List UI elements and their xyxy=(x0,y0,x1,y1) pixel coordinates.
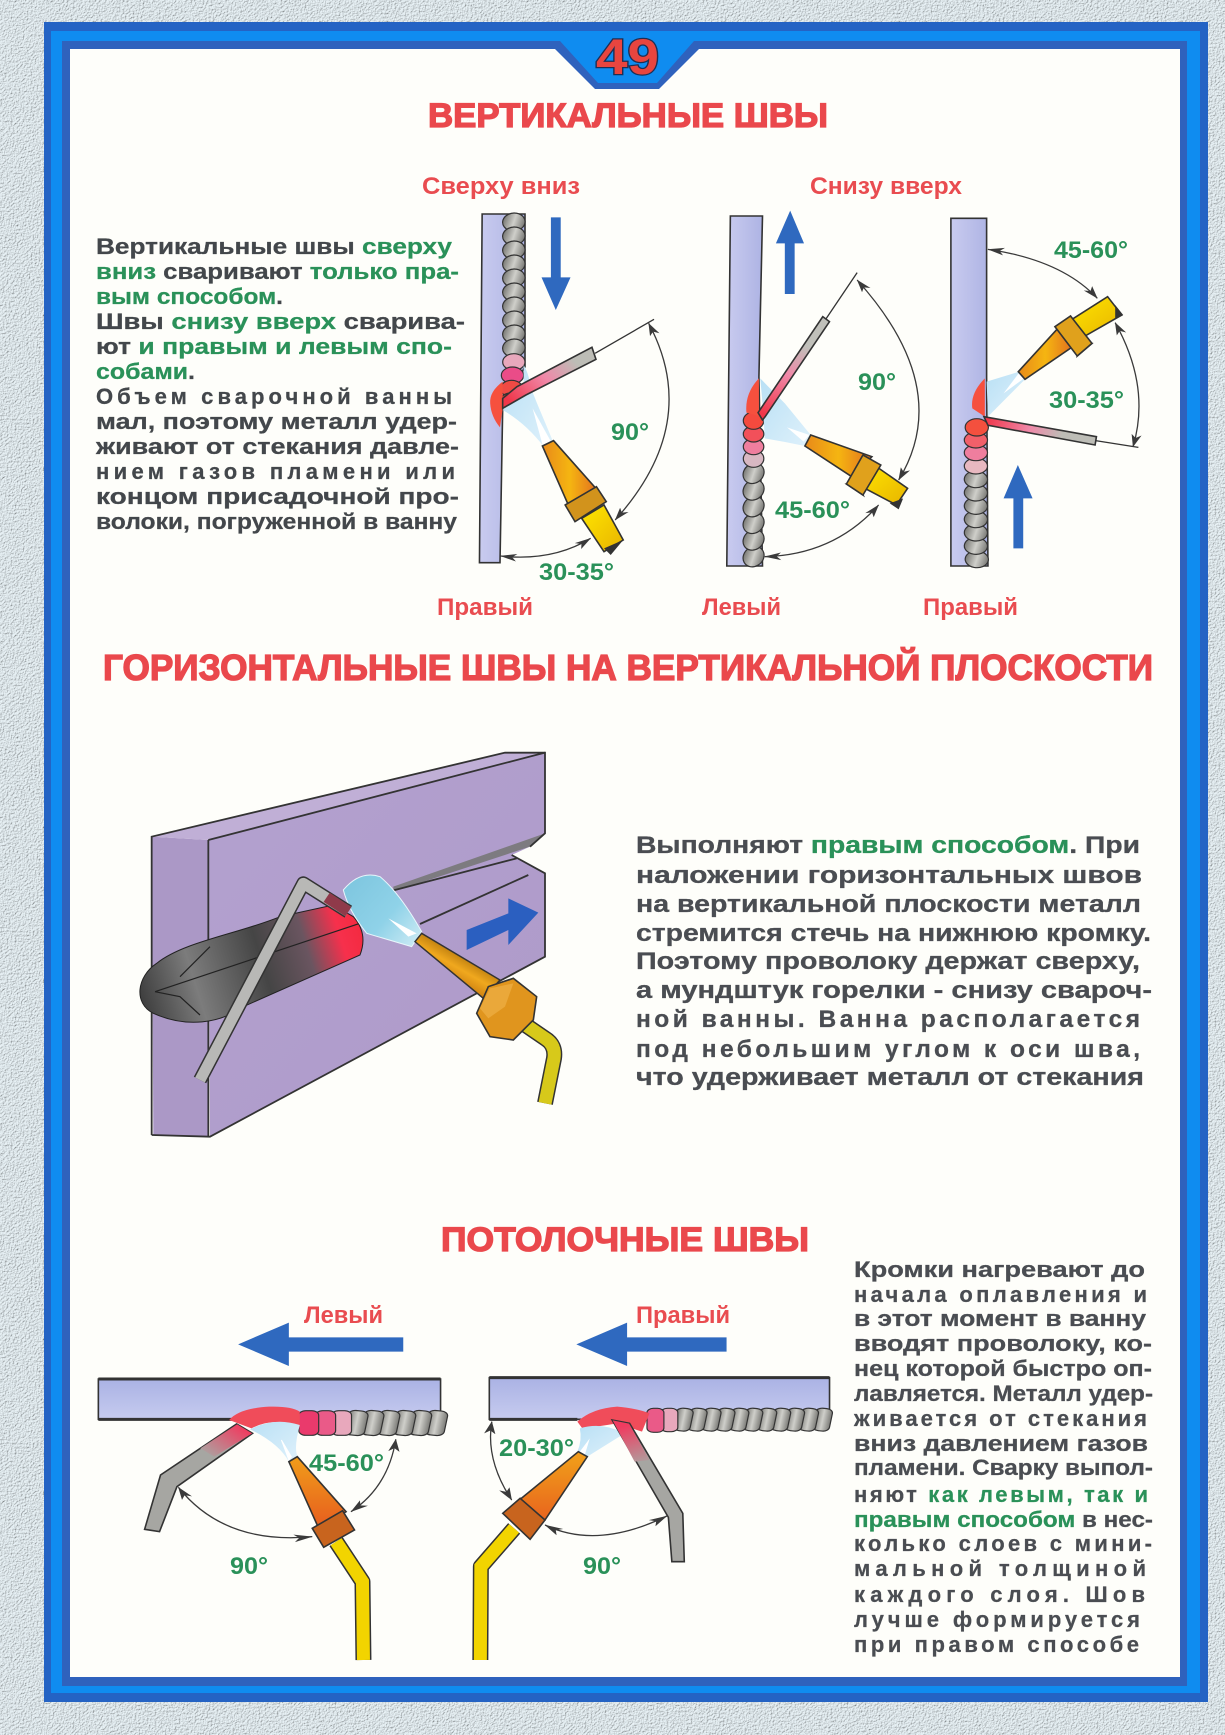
labels: ceiling seams: 45-60° xyxy=(309,1450,384,1477)
blue arrow xyxy=(467,898,538,950)
labels: ceiling seams: 90° xyxy=(230,1553,268,1580)
blue arrow xyxy=(576,1323,727,1366)
weld beads xyxy=(299,1410,448,1436)
diagram: ceiling seam, left method xyxy=(98,1323,448,1660)
text block: vertical seams: ют и правым и левым спо- xyxy=(96,334,452,359)
text block: ceiling seams: няют как левым, так и xyxy=(854,1482,1148,1507)
torch tube xyxy=(480,1528,514,1660)
plate xyxy=(489,1378,830,1419)
method labels: vertical seams: Правый xyxy=(923,594,1018,621)
torch nozzle xyxy=(515,1452,587,1520)
text block: ceiling seams: лучше формируется xyxy=(854,1607,1140,1632)
text block: ceiling seams: каждого слоя. Шов xyxy=(854,1582,1145,1607)
text block: ceiling seams: при правом способе xyxy=(854,1632,1139,1657)
labels: ceiling seams: Левый xyxy=(304,1302,383,1329)
text block: vertical seams xyxy=(95,234,465,534)
torch tube xyxy=(513,1017,554,1103)
text block: horizontal seams xyxy=(636,832,1152,1091)
text block: vertical seams: вниз сваривают только пра- xyxy=(96,259,459,284)
blue arrow down xyxy=(542,217,571,310)
text block: vertical seams: Швы снизу вверх сварива- xyxy=(96,309,465,334)
flame xyxy=(760,378,811,446)
flame xyxy=(250,1422,300,1462)
diagram: top-down right method xyxy=(479,211,669,563)
text block: ceiling seams: вниз давлением газов xyxy=(854,1431,1148,1456)
text block: horizontal seams: под небольшим углом к оси шва, xyxy=(636,1036,1140,1063)
flame xyxy=(503,365,553,447)
filler wire xyxy=(200,883,348,1080)
weld beads xyxy=(647,1408,833,1432)
torch nut xyxy=(312,1511,355,1547)
angle labels: vertical seams: 30-35° xyxy=(539,559,614,586)
molten pool xyxy=(229,1407,300,1428)
labels: ceiling seams: 20-30° xyxy=(499,1435,574,1462)
diagram: ceiling seam, right method xyxy=(480,1323,833,1660)
text block: ceiling seams: в этот момент в ванну xyxy=(854,1306,1147,1331)
blue arrow xyxy=(238,1323,403,1366)
text block: ceiling seams: правым способом в нес- xyxy=(854,1507,1153,1532)
title: horizontal seams: ГОРИЗОНТАЛЬНЫЕ ШВЫ НА ВЕРТИКАЛЬНОЙ ПЛОСКОСТИ xyxy=(103,646,1153,688)
text block: ceiling seams: пламени. Сварку выпол- xyxy=(854,1455,1153,1480)
weld beads xyxy=(962,419,991,570)
angle labels: vertical seams: 90° xyxy=(611,419,649,446)
text block: vertical seams: концом присадочной про- xyxy=(96,484,459,509)
torch tube xyxy=(336,1542,363,1660)
text block: horizontal seams: на вертикальной плоскости металл xyxy=(636,891,1141,918)
torch nut xyxy=(503,1498,545,1539)
text block: ceiling seams: Кромки нагревают до xyxy=(854,1257,1145,1282)
text block: vertical seams: Объем сварочной ванны xyxy=(96,384,452,409)
text block: ceiling seams: живается от стекания xyxy=(853,1406,1147,1431)
text block: ceiling seams: лавляется. Металл удер- xyxy=(854,1381,1153,1406)
method labels: vertical seams: Правый xyxy=(437,594,533,621)
filler wire xyxy=(503,347,596,408)
angle arcs xyxy=(491,1422,512,1500)
angle labels: vertical seams: 90° xyxy=(858,369,896,396)
plates xyxy=(152,837,208,1137)
text block: horizontal seams: что удерживает металл от стекания xyxy=(636,1064,1144,1091)
molten pool xyxy=(490,382,503,427)
torch xyxy=(1018,327,1073,379)
method labels: vertical seams: Левый xyxy=(702,594,781,621)
filler wire xyxy=(758,317,829,420)
text block: vertical seams: живают от стекания давле- xyxy=(95,434,459,459)
page number: 49 xyxy=(596,29,659,85)
text block: vertical seams: волоки, погруженной в ванну xyxy=(96,509,458,534)
weld seam xyxy=(140,905,363,1022)
text block: ceiling seams: мальной толщиной xyxy=(854,1556,1146,1581)
text block: ceiling seams: вводят проволоку, ко- xyxy=(854,1331,1152,1356)
text block: horizontal seams: Выполняют правым способом . При xyxy=(636,832,1140,859)
text block: ceiling seams: нец которой быстро оп- xyxy=(854,1356,1152,1381)
text block: horizontal seams: стремится стечь на нижнюю кромку. xyxy=(636,920,1151,947)
plate xyxy=(98,1379,441,1419)
text block: horizontal seams: Поэтому проволоку держат сверху, xyxy=(636,948,1140,975)
text block: horizontal seams: ной ванны. Ванна располагается xyxy=(636,1006,1140,1033)
angle labels: vertical seams xyxy=(539,237,1128,586)
weld beads xyxy=(740,412,767,569)
text block: ceiling seams xyxy=(853,1257,1153,1657)
text block: vertical seams: собами . xyxy=(96,359,195,384)
filler wire xyxy=(612,1420,684,1562)
plate xyxy=(727,216,763,566)
blue arrow up xyxy=(1004,465,1033,548)
angle labels: vertical seams: 30-35° xyxy=(1049,387,1124,414)
angle labels: vertical seams: 45-60° xyxy=(775,497,850,524)
angle labels: vertical seams: 45-60° xyxy=(1054,237,1128,264)
torch nozzle xyxy=(289,1457,346,1528)
text block: vertical seams: нием газов пламени или xyxy=(96,459,455,484)
diagram: horizontal seam on vertical plane xyxy=(140,753,554,1137)
filler wire xyxy=(984,417,1096,445)
method labels: vertical seams xyxy=(437,594,1018,621)
text block: horizontal seams: а мундштук горелки - снизу свароч- xyxy=(636,977,1152,1004)
text block: vertical seams: мал, поэтому металл удер- xyxy=(96,409,457,434)
plate xyxy=(479,214,525,563)
flame xyxy=(987,372,1025,417)
diagram: bottom-up right method xyxy=(951,218,1139,570)
molten pool xyxy=(746,378,759,416)
angle arcs xyxy=(988,249,1097,298)
plate xyxy=(951,218,988,566)
text block: vertical seams: Вертикальные швы сверху xyxy=(96,234,453,259)
angle arcs xyxy=(615,323,669,520)
torch xyxy=(542,441,597,518)
labels: ceiling seams: 90° xyxy=(583,1553,621,1580)
flame xyxy=(577,1426,625,1457)
filler wire xyxy=(145,1424,253,1532)
flame xyxy=(343,875,422,947)
label: bottom up: Снизу вверх xyxy=(810,173,963,200)
text block: ceiling seams: колько слоев с мини- xyxy=(854,1531,1152,1556)
title: ceiling seams: ПОТОЛОЧНЫЕ ШВЫ xyxy=(441,1221,809,1259)
text block: vertical seams: вым способом . xyxy=(96,284,283,309)
angle arcs xyxy=(857,280,919,480)
blue arrow up xyxy=(776,211,804,294)
torch nozzle xyxy=(415,933,500,998)
weld beads xyxy=(500,211,528,408)
text block: horizontal seams: наложении горизонтальных швов xyxy=(636,862,1142,889)
title: vertical seams: ВЕРТИКАЛЬНЫЕ ШВЫ xyxy=(428,97,828,135)
molten pool xyxy=(972,378,985,417)
angle arcs xyxy=(351,1439,396,1512)
text block: ceiling seams: начала оплавления и xyxy=(854,1282,1147,1307)
label: top down: Сверху вниз xyxy=(422,173,580,200)
labels: ceiling seams xyxy=(230,1302,730,1580)
labels: ceiling seams: Правый xyxy=(636,1302,730,1329)
torch xyxy=(805,435,872,477)
torch nut xyxy=(477,978,537,1040)
molten pool xyxy=(577,1407,649,1432)
diagram: bottom-up left method xyxy=(727,211,919,569)
